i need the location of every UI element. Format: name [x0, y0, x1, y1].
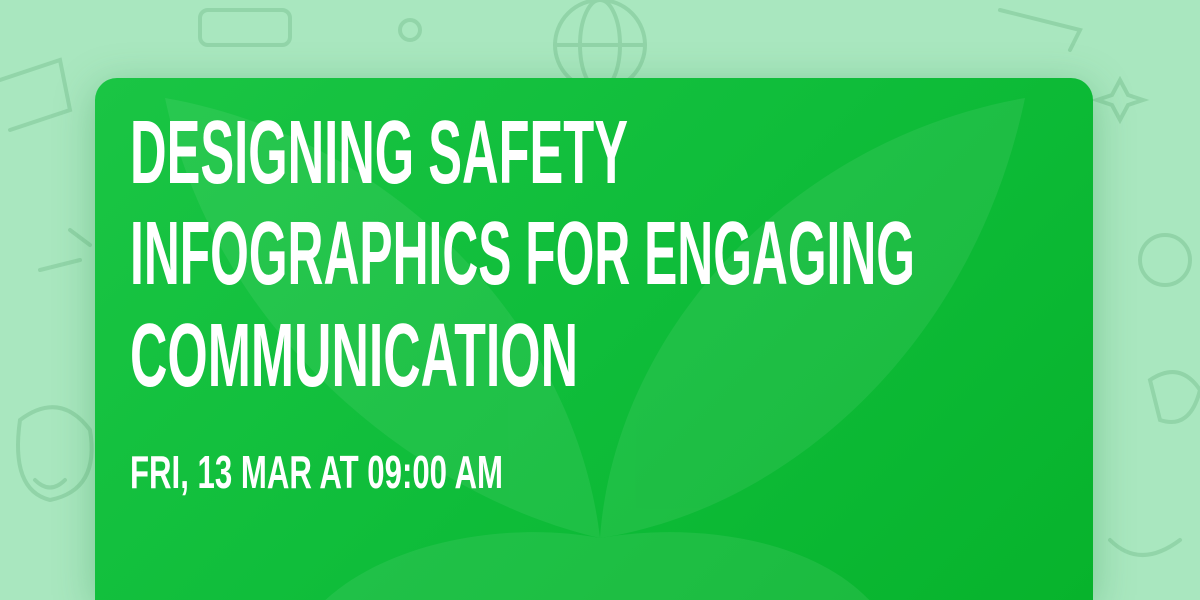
card	[95, 78, 1093, 600]
title: DESIGNING SAFETY	[130, 103, 628, 203]
decorative leaves	[165, 98, 1025, 600]
title: COMMUNICATION	[130, 306, 578, 406]
title	[130, 103, 915, 406]
date: FRI, 13 MAR AT 09:00 AM	[130, 446, 503, 498]
